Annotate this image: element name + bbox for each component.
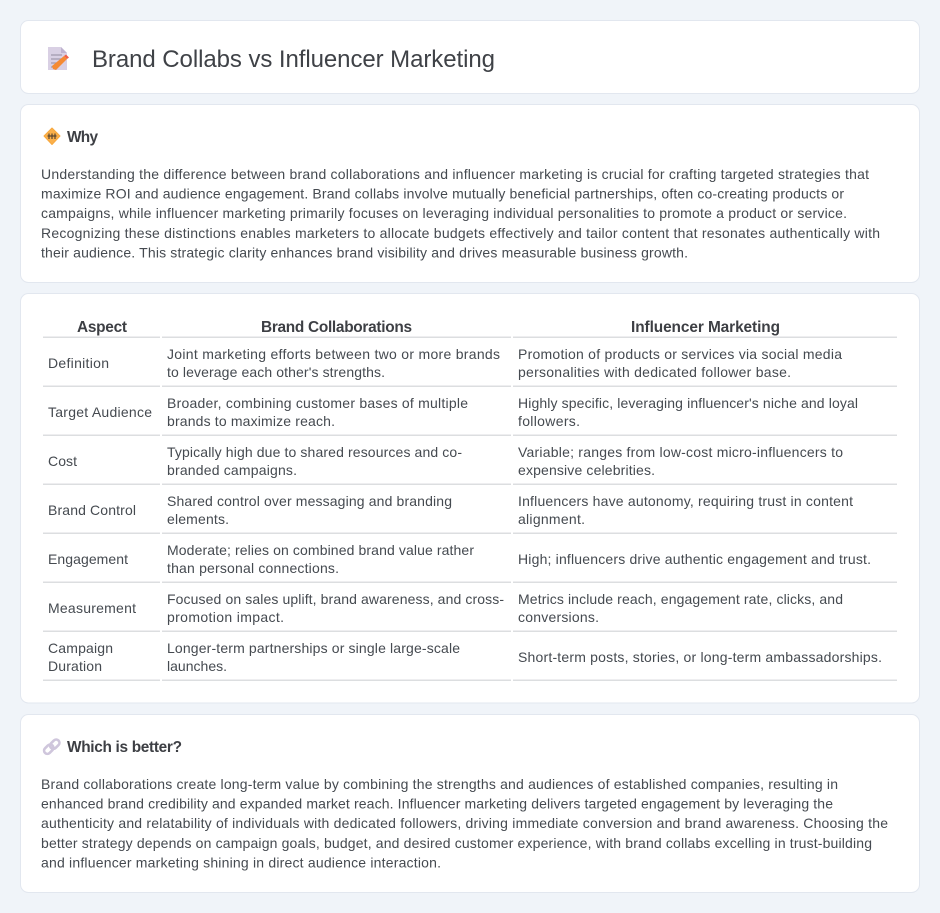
table row: target audience: Target Audience — [48, 404, 152, 420]
panel: title header — [20, 20, 920, 94]
heading: why: Why — [67, 129, 98, 146]
table row: target audience: Highly specific, leveraging influencer's niche and loyal — [518, 395, 858, 411]
table row: definition: Definition — [48, 355, 109, 371]
panel: comparison table — [20, 294, 920, 703]
table row: definition: Joint marketing efforts between two or more brands — [167, 346, 500, 362]
table row: campaign duration: Longer-term partnerships or single large-scale — [167, 640, 460, 656]
table row: brand control: Shared control over messaging and branding — [167, 493, 452, 509]
table header row — [77, 319, 780, 336]
text block: why paragraph: maximize ROI and audience engagement. Brand collabs involve mutually beneficial partnerships, often co-creating products or — [41, 186, 844, 202]
text block: which is better paragraph: better strategy depends on campaign goals, budget, and desired customer experience, with brand collabs excelling in trust-building — [41, 835, 872, 851]
table row: cost: Cost — [48, 453, 77, 469]
table row: brand control: Influencers have autonomy, requiring trust in content — [518, 493, 853, 509]
table row: definition — [48, 346, 842, 380]
title: Brand Collabs vs Influencer Marketing — [92, 46, 495, 73]
text block: why paragraph: Recognizing these distinctions enables marketers to allocate budgets effectively and tailor content that resonates authentically with — [41, 225, 880, 241]
table header row: Influencer Marketing — [631, 319, 780, 336]
heading: which is better: Which is better? — [67, 739, 182, 756]
table row: measurement — [48, 591, 843, 625]
table row: measurement: Metrics include reach, engagement rate, clicks, and — [518, 591, 843, 607]
table row: engagement: Engagement — [48, 551, 128, 567]
table row: target audience: Broader, combining customer bases of multiple — [167, 395, 468, 411]
text block: which is better paragraph: and influencer marketing shining in direct audience interaction. — [41, 854, 441, 870]
table row: definition: to leverage each other's strengths. — [167, 364, 385, 380]
table row: target audience — [48, 395, 858, 429]
table row: campaign duration: launches. — [167, 658, 227, 674]
icon: diamond sign — [44, 128, 60, 144]
table row: cost: branded campaigns. — [167, 462, 297, 478]
panel: why — [20, 104, 920, 282]
table row: measurement: conversions. — [518, 609, 599, 625]
table row: target audience: followers. — [518, 413, 580, 429]
table header row: Brand Collaborations — [261, 319, 412, 336]
table header row: Aspect — [77, 319, 127, 336]
table row: engagement — [48, 542, 871, 576]
text block: why paragraph: Understanding the difference between brand collaborations and influencer marketing is crucial for crafting targeted strategies that — [41, 166, 869, 182]
table row: cost: Typically high due to shared resources and co- — [167, 444, 462, 460]
table row: cost: expensive celebrities. — [518, 462, 655, 478]
table row: campaign duration: Short-term posts, stories, or long-term ambassadorships. — [518, 649, 882, 665]
table row: measurement: Focused on sales uplift, brand awareness, and cross- — [167, 591, 504, 607]
table row: campaign duration: Campaign — [48, 640, 113, 656]
table row: brand control: elements. — [167, 511, 229, 527]
table row: measurement: Measurement — [48, 600, 136, 616]
panel: which is better — [20, 714, 920, 892]
table row: cost — [48, 444, 843, 478]
text block: which is better paragraph: Brand collaborations create long-term value by combining the strengths and audiences of established companies, resulting in — [41, 776, 838, 792]
table row: campaign duration: Duration — [48, 658, 102, 674]
table row: target audience: brands to maximize reach. — [167, 413, 335, 429]
table row: brand control — [48, 493, 853, 527]
icon: document with pencil — [48, 47, 69, 70]
text block: which is better paragraph — [41, 776, 888, 870]
text block: which is better paragraph: enhanced brand credibility and expanded market reach. Influencer marketing delivers targeted engagement by leveraging the — [41, 796, 833, 812]
table row: measurement: promotion impact. — [167, 609, 284, 625]
table row: engagement: Moderate; relies on combined brand value rather — [167, 542, 474, 558]
table row: engagement: than personal connections. — [167, 560, 339, 576]
table row: engagement: High; influencers drive authentic engagement and trust. — [518, 551, 871, 567]
table row: definition: Promotion of products or services via social media — [518, 346, 842, 362]
text block: why paragraph — [41, 166, 880, 260]
table row: campaign duration — [48, 640, 882, 674]
table row: definition: personalities with dedicated follower base. — [518, 364, 791, 380]
table row: cost: Variable; ranges from low-cost micro-influencers to — [518, 444, 843, 460]
text block: which is better paragraph: authenticity and relatability of individuals with dedicated followers, driving immediate conversion and brand awareness. Choosing the — [41, 815, 888, 831]
text block: why paragraph: their audience. This strategic clarity enhances brand visibility and drives measurable business growth. — [41, 244, 688, 260]
icon: chain link — [43, 738, 61, 755]
table row: brand control: Brand Control — [48, 502, 136, 518]
table row: brand control: alignment. — [518, 511, 585, 527]
text block: why paragraph: campaigns, while influencer marketing primarily focuses on leveraging individual personalities to promote a product or service. — [41, 205, 847, 221]
